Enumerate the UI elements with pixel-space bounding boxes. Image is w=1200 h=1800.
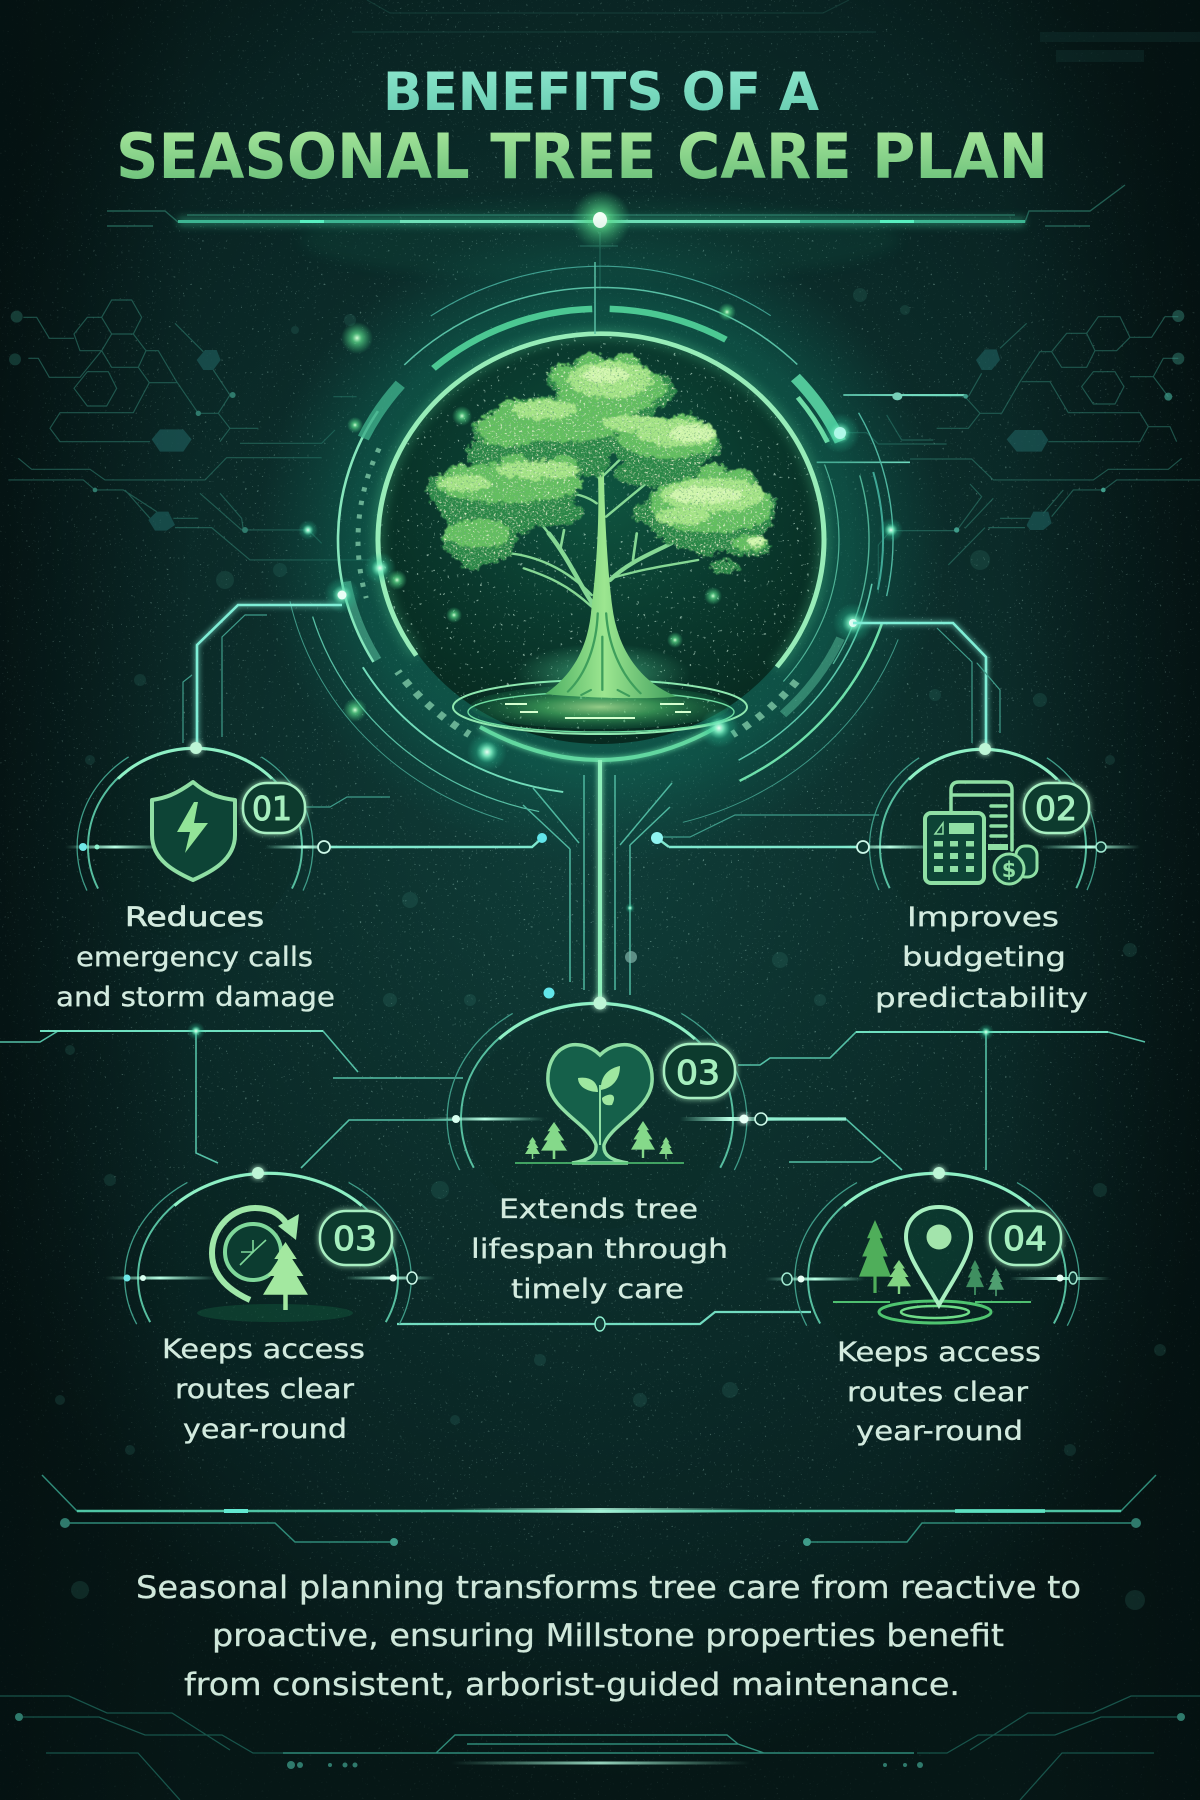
circuit lines: right hexagon network [817,310,1200,593]
badge 02: 02 [1035,789,1077,828]
title divider with glowing node [107,185,1125,290]
title line 1: BENEFITS OF A [383,62,819,123]
node 02 label: budgeting [902,942,1066,973]
link to node 1 [324,838,542,847]
node 01 frame [65,742,345,941]
node 04 label [837,1337,1041,1447]
tick marks [356,448,382,599]
link to node 2 [657,838,863,847]
badge 03 center [664,1044,735,1098]
node 02 label [875,902,1088,1014]
node 02: improves budgeting predictability [840,743,1140,1014]
footer divider [42,1475,1156,1546]
tree [426,353,776,703]
branches [503,445,698,607]
node 03 left label: year-round [183,1414,347,1445]
icon: budget calculator, document and coins: $ [1002,858,1016,882]
footer summary text: proactive, ensuring Millstone properties benefit [212,1618,1004,1654]
node 03 label: timely care [511,1274,684,1305]
node 04 label: Keeps access [837,1337,1041,1368]
title line 2: SEASONAL TREE CARE PLAN [116,120,1048,193]
lower right connectors [738,1032,1145,1170]
node 04 label: year-round [856,1416,1023,1447]
node 04 frame [765,1167,1110,1380]
hero halo [256,215,946,865]
badge 01: 01 [252,789,292,828]
node 03 left frame [105,1167,435,1378]
node 02 label: predictability [875,983,1088,1014]
bottom circuit decoration [0,1696,1200,1800]
node 03 label: Extends tree [499,1194,698,1225]
badge 03 center: 03 [676,1053,720,1092]
footer summary text: from consistent, arborist-guided maintenance. [184,1667,960,1703]
hero: tree inside glowing rings [286,222,916,837]
icon: shield with lightning bolt [152,782,235,880]
node 03 left label [162,1334,365,1445]
lower left connectors [0,1030,463,1168]
bottom link [397,1312,811,1324]
node 04 label: routes clear [847,1377,1029,1408]
node 03 label: lifespan through [471,1234,728,1265]
badge 02 [1024,783,1089,833]
node 03 left: keeps access routes clear [105,1167,435,1445]
icon: heart with sprout and pines [515,1045,684,1163]
badge 03 left: 03 [333,1219,377,1258]
icon: budget calculator, document and coins [925,782,1037,884]
trunk [545,467,677,698]
foliage [426,353,776,573]
node 01: reduces emergency calls [56,742,345,1013]
disc under tree [453,680,747,734]
node 02 label: Improves [907,902,1059,933]
circuit lines: left hexagon network [8,300,370,560]
footer summary text: Seasonal planning transforms tree care from reactive to [136,1570,1081,1606]
title [116,62,1048,193]
bright inner ring [291,254,911,826]
node 01 label: emergency calls [76,942,313,973]
badge 04 [990,1211,1061,1265]
footer summary text [136,1570,1081,1703]
node 03 left label: Keeps access [162,1334,365,1365]
badge 01 [243,783,305,833]
node 04: keeps access routes clear [765,1167,1110,1447]
node 01 label: and storm damage [56,982,335,1013]
node 02 frame [840,743,1140,940]
node 03 left label: routes clear [175,1374,355,1405]
center trunk [598,760,602,1003]
icon: seasonal cycle with pine [197,1208,353,1322]
icon: map pin with pines and ripples [833,1207,1031,1323]
connectors from hero to nodes [0,605,1145,1331]
inner sphere [380,336,822,744]
node 01 label [56,902,335,1013]
badge 04: 04 [1003,1219,1047,1258]
ring system [290,266,898,823]
badge 03 left [320,1211,392,1265]
node 03 label [471,1194,728,1305]
node 01 label: Reduces [125,902,264,933]
lower bright arc [480,727,717,760]
node 03 frame [425,996,780,1229]
node 03: extends tree lifespan [425,996,780,1305]
hero flares [298,303,903,772]
